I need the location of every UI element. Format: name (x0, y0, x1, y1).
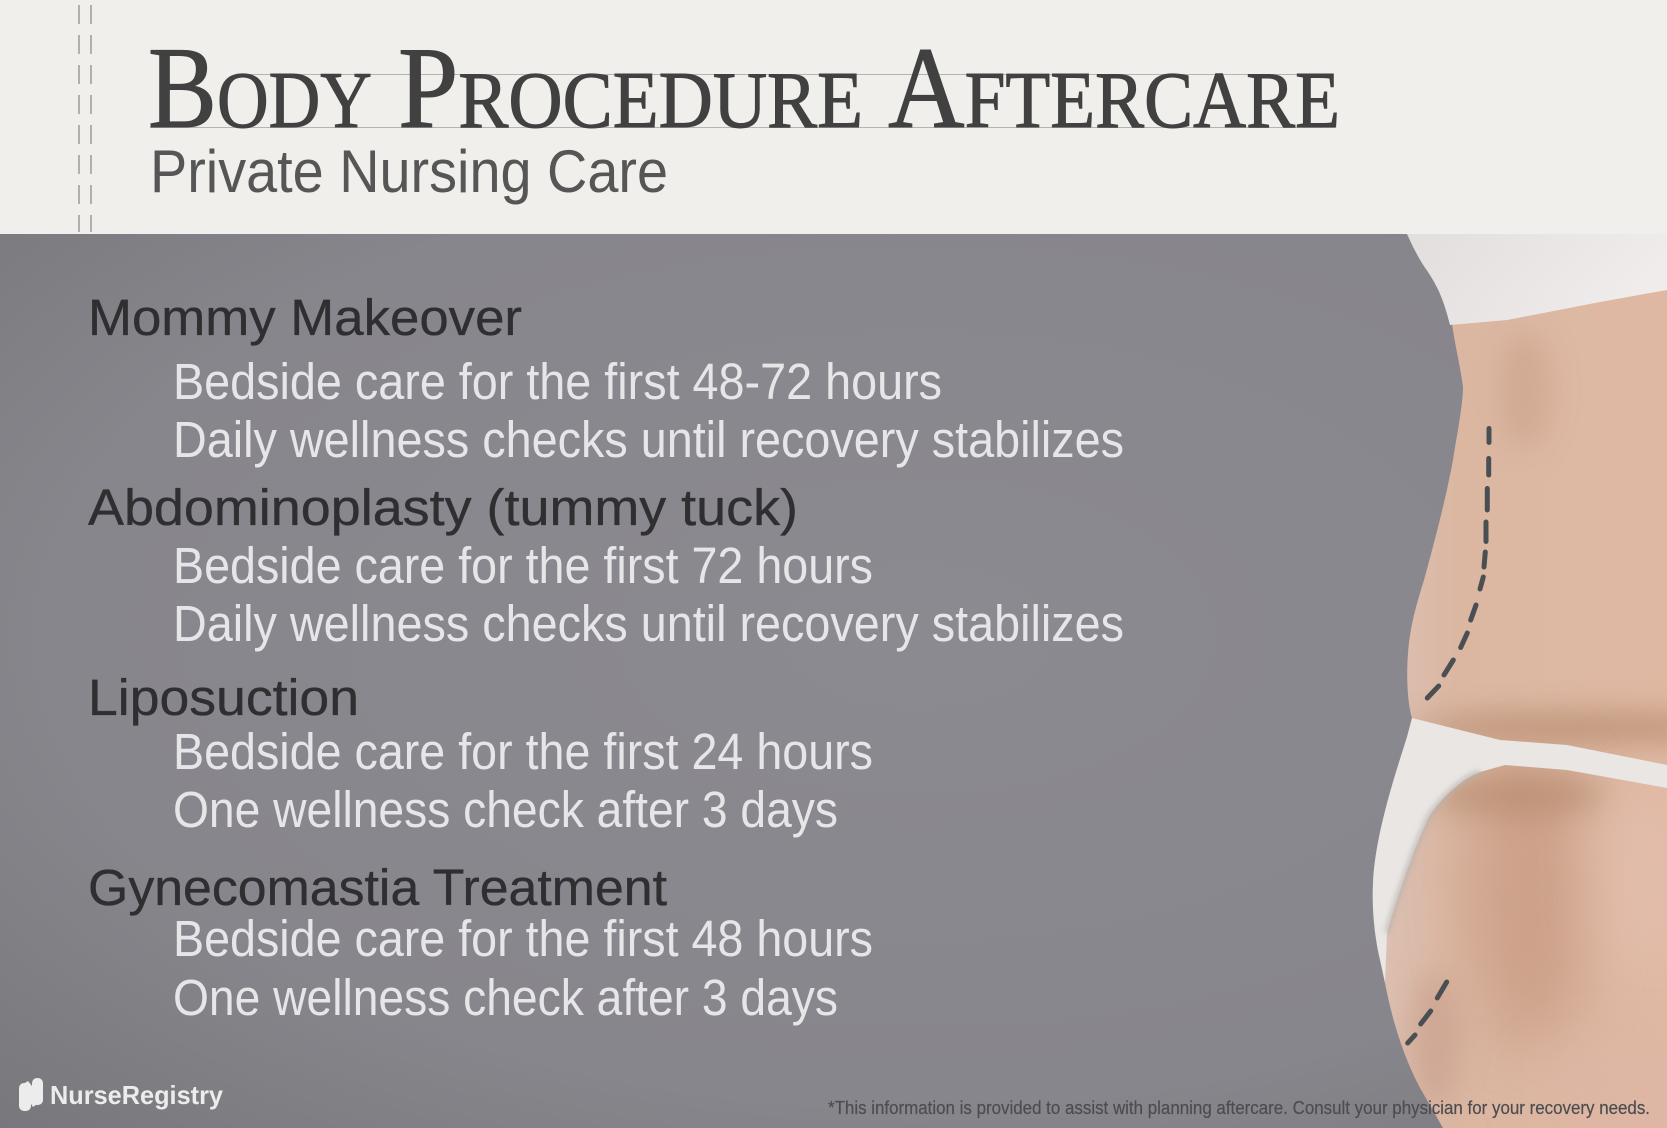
panel: mommy makeover (88, 289, 1124, 468)
panel: gynecomastia treatment: Gynecomastia Treatment (88, 859, 667, 916)
illustration: torso with surgical markings (1360, 234, 1667, 1128)
panel: gynecomastia treatment (88, 859, 873, 1026)
panel: abdominoplasty (88, 479, 1124, 652)
panel: mommy makeover: Mommy Makeover (88, 289, 522, 346)
logo: NurseRegistry: NurseRegistry (50, 1080, 224, 1110)
title guide lines (150, 74, 1335, 128)
panel: gynecomastia treatment: Bedside care for the first 48 hours (173, 910, 873, 967)
panel: liposuction: Bedside care for the first 24 hours (173, 723, 873, 780)
garment: top (1407, 234, 1667, 325)
panel: liposuction: Liposuction (88, 669, 359, 726)
panel: abdominoplasty: Daily wellness checks until recovery stabilizes (173, 595, 1124, 652)
surgical dashed markings (1408, 428, 1489, 1043)
panel: mommy makeover: Bedside care for the first 48-72 hours (173, 353, 942, 410)
panel: abdominoplasty: Abdominoplasty (tummy tuck) (88, 479, 798, 536)
grey content panel (0, 234, 1667, 1128)
subtitle: Private Nursing Care (150, 138, 668, 205)
garment: brief (1373, 718, 1667, 983)
panel: liposuction (88, 669, 873, 838)
panel: liposuction: One wellness check after 3 days (173, 781, 838, 838)
title: AFTERCARE (888, 24, 1340, 153)
icon: N mark (19, 1078, 43, 1111)
panel: abdominoplasty: Bedside care for the first 72 hours (173, 537, 873, 594)
title: PROCEDURE (398, 24, 863, 153)
panel: gynecomastia treatment: One wellness check after 3 days (173, 969, 838, 1026)
title: BODY (148, 24, 372, 153)
dashed guide lines (79, 5, 91, 232)
panel: mommy makeover: Daily wellness checks until recovery stabilizes (173, 411, 1124, 468)
header band (0, 0, 1667, 234)
title (148, 24, 1340, 153)
